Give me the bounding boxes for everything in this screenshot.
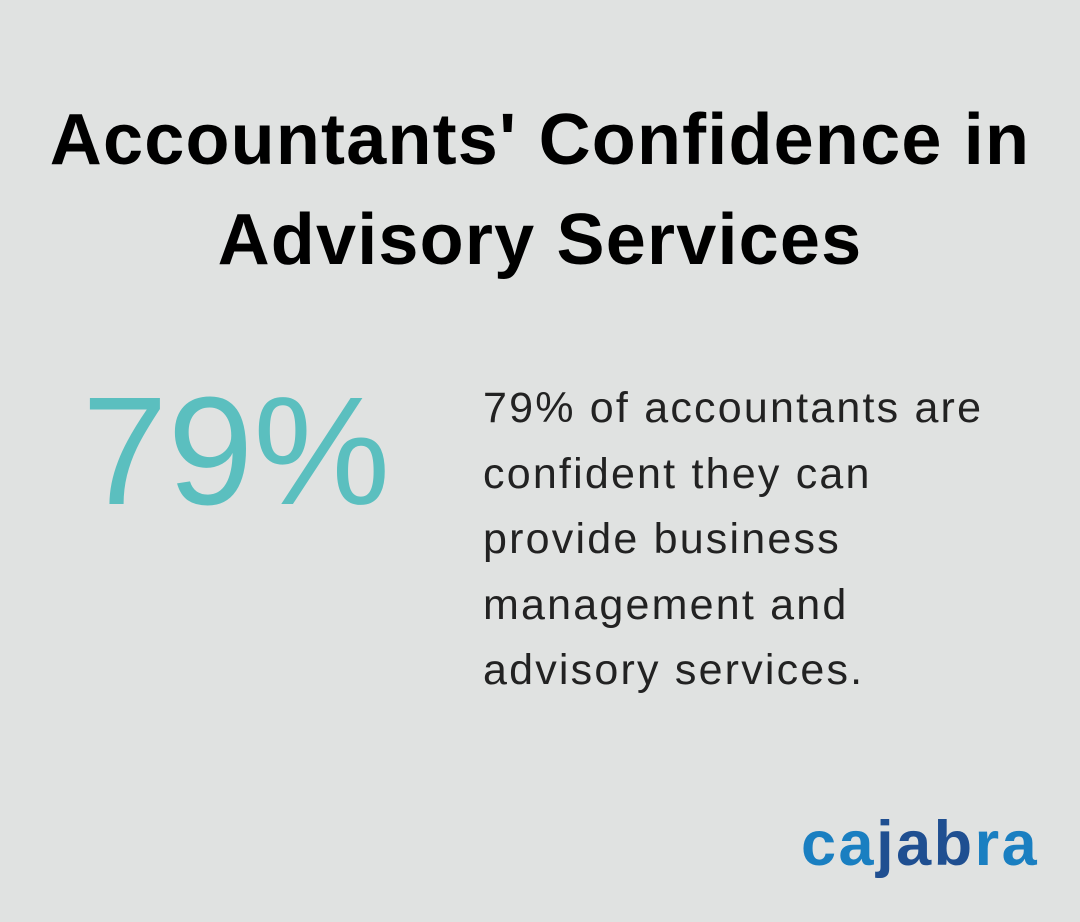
title: Advisory Services <box>218 200 862 280</box>
description text <box>483 384 983 694</box>
description text: provide business <box>483 515 841 563</box>
title <box>50 100 1030 280</box>
description text: advisory services. <box>483 646 864 694</box>
description text: confident they can <box>483 450 872 498</box>
description text: management and <box>483 580 848 628</box>
logo: cajabra: cajabra <box>801 809 1039 879</box>
description text: 79% of accountants are <box>483 384 983 432</box>
title: Accountants' Confidence in <box>50 100 1030 180</box>
big statistic: 79% <box>82 365 390 537</box>
